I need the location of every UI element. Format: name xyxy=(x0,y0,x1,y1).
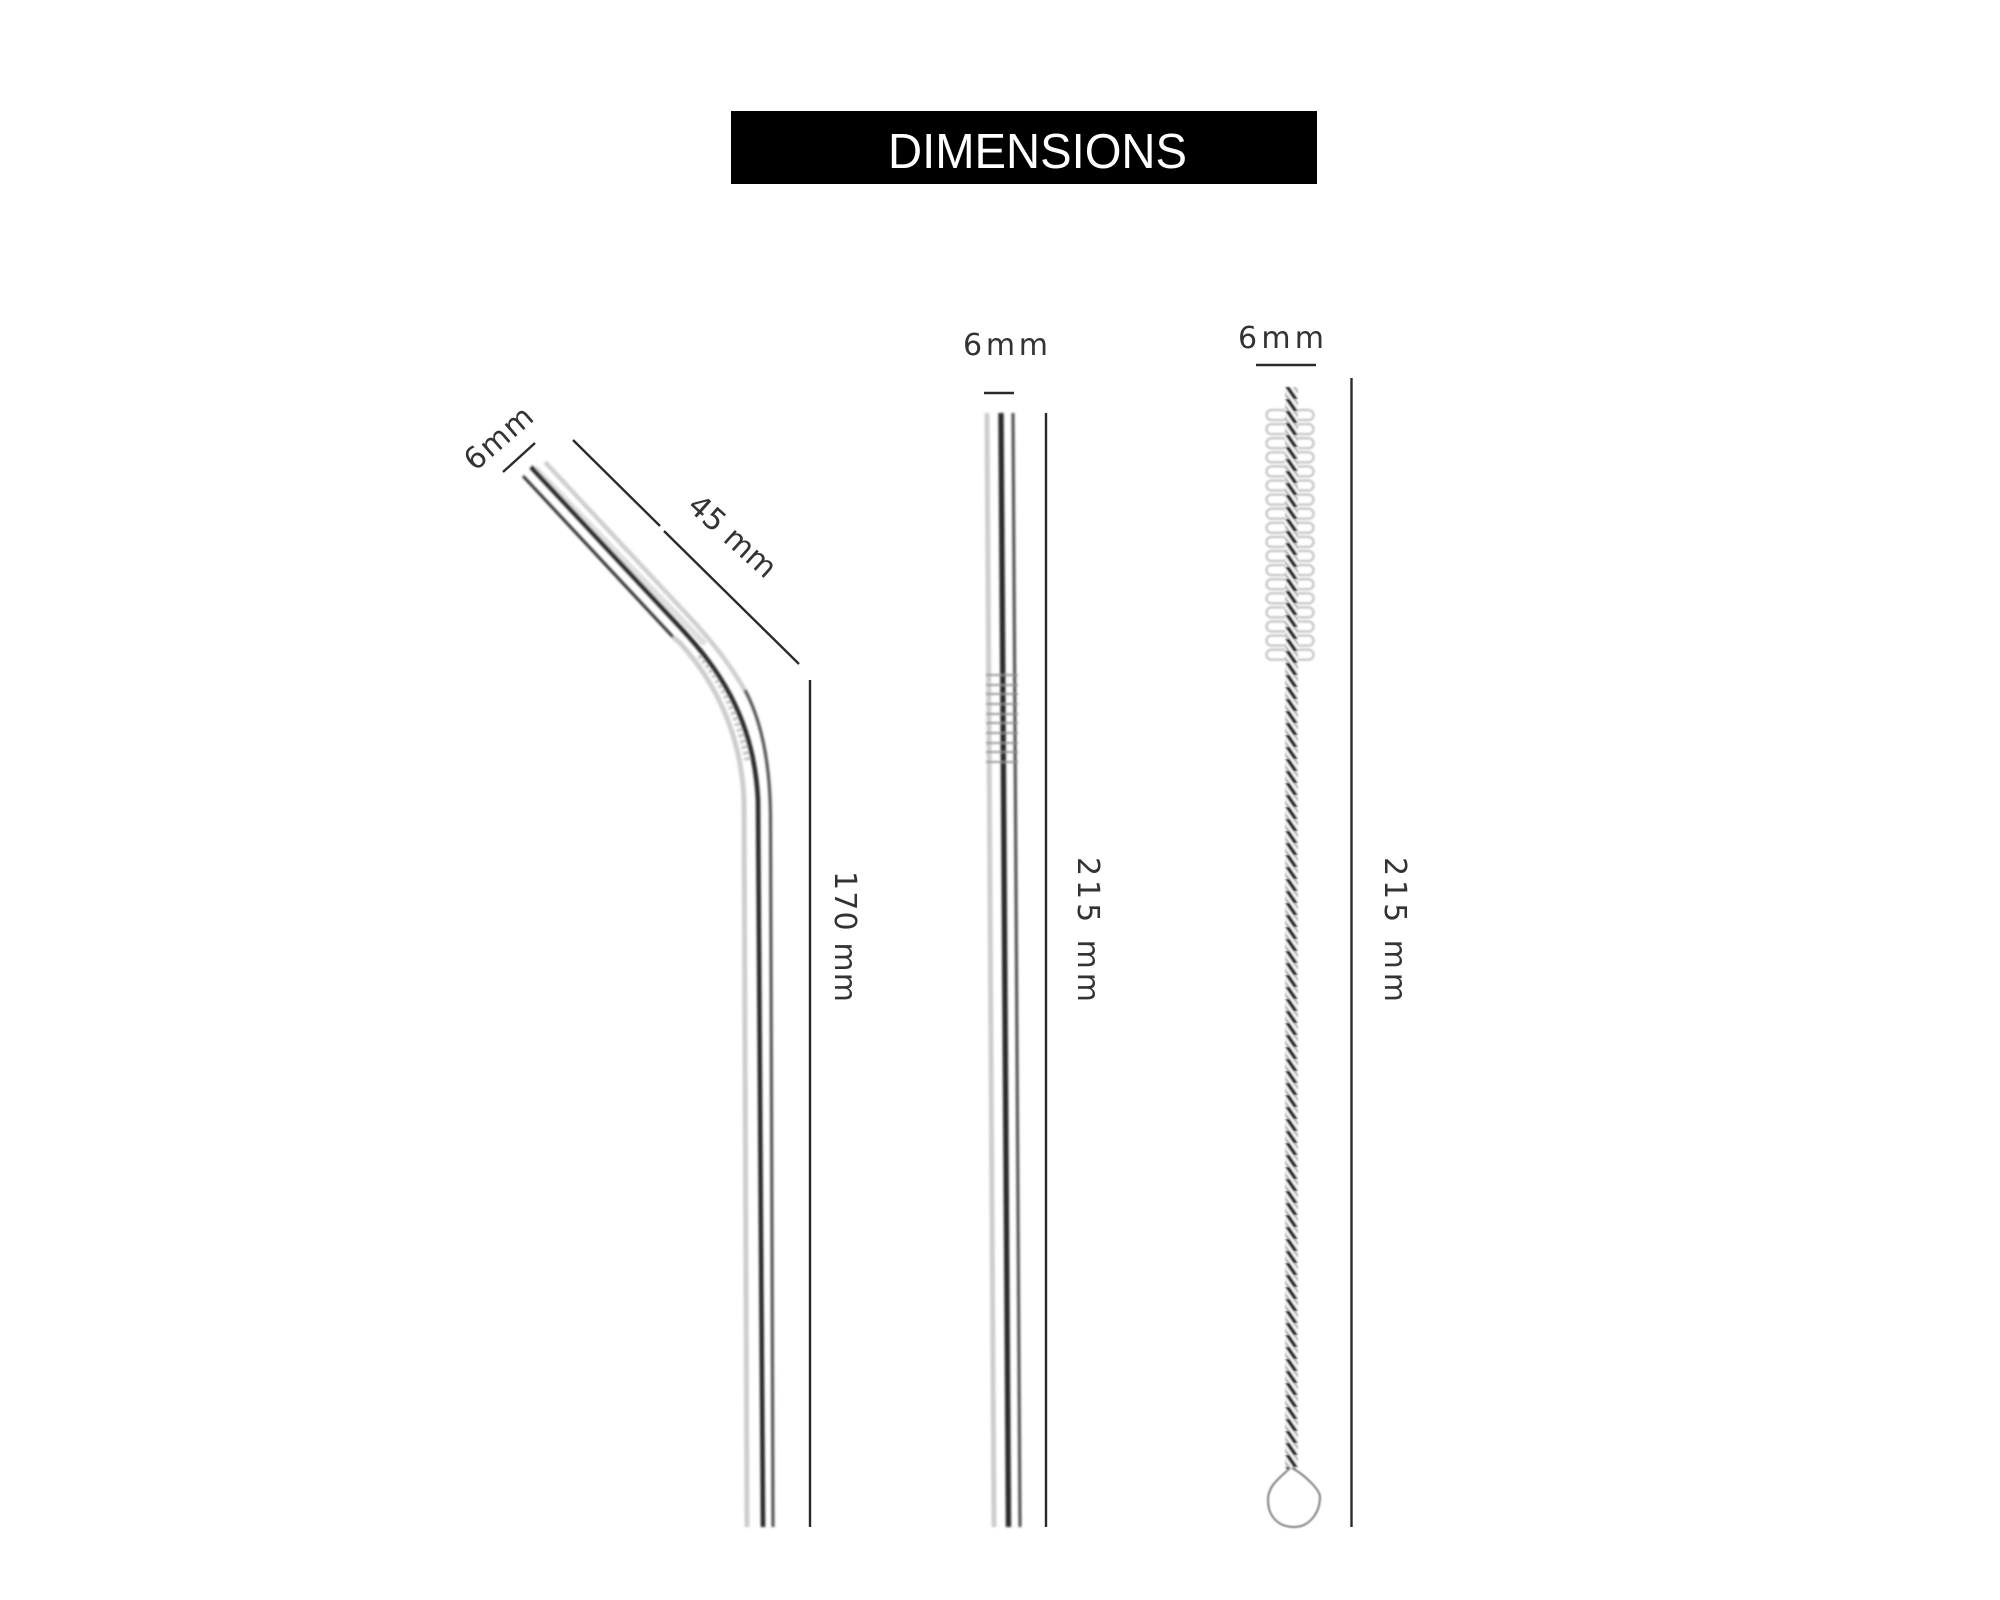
title banner: DIMENSIONS xyxy=(888,125,1187,179)
bent straw with dimensions xyxy=(457,399,862,1527)
width line and label: 6mm: 6mm xyxy=(457,399,541,478)
length line and label: 45 mm: 45 mm xyxy=(681,488,784,586)
cleaning brush with dimensions xyxy=(1238,321,1412,1527)
straight straw body xyxy=(986,413,1020,1527)
ribbed section xyxy=(986,675,1018,762)
width line and label: 6mm: 6mm xyxy=(963,328,1048,363)
straight straw with dimensions xyxy=(963,328,1105,1527)
wire loop xyxy=(1268,1468,1320,1527)
length line and label: 45 mm xyxy=(573,440,799,664)
twisted wire xyxy=(1285,387,1298,1469)
brush body xyxy=(1265,387,1320,1527)
bristles xyxy=(1265,408,1315,662)
length line and label: 170 mm: 170 mm xyxy=(827,871,862,1002)
bent straw body xyxy=(523,462,773,1527)
width line and label: 6mm xyxy=(963,328,1048,393)
title banner xyxy=(731,111,1317,184)
length line and label: 215 mm: 215 mm xyxy=(1377,857,1412,1002)
length line and label: 215 mm: 215 mm xyxy=(1070,857,1105,1002)
width line and label: 6mm: 6mm xyxy=(1238,321,1324,356)
